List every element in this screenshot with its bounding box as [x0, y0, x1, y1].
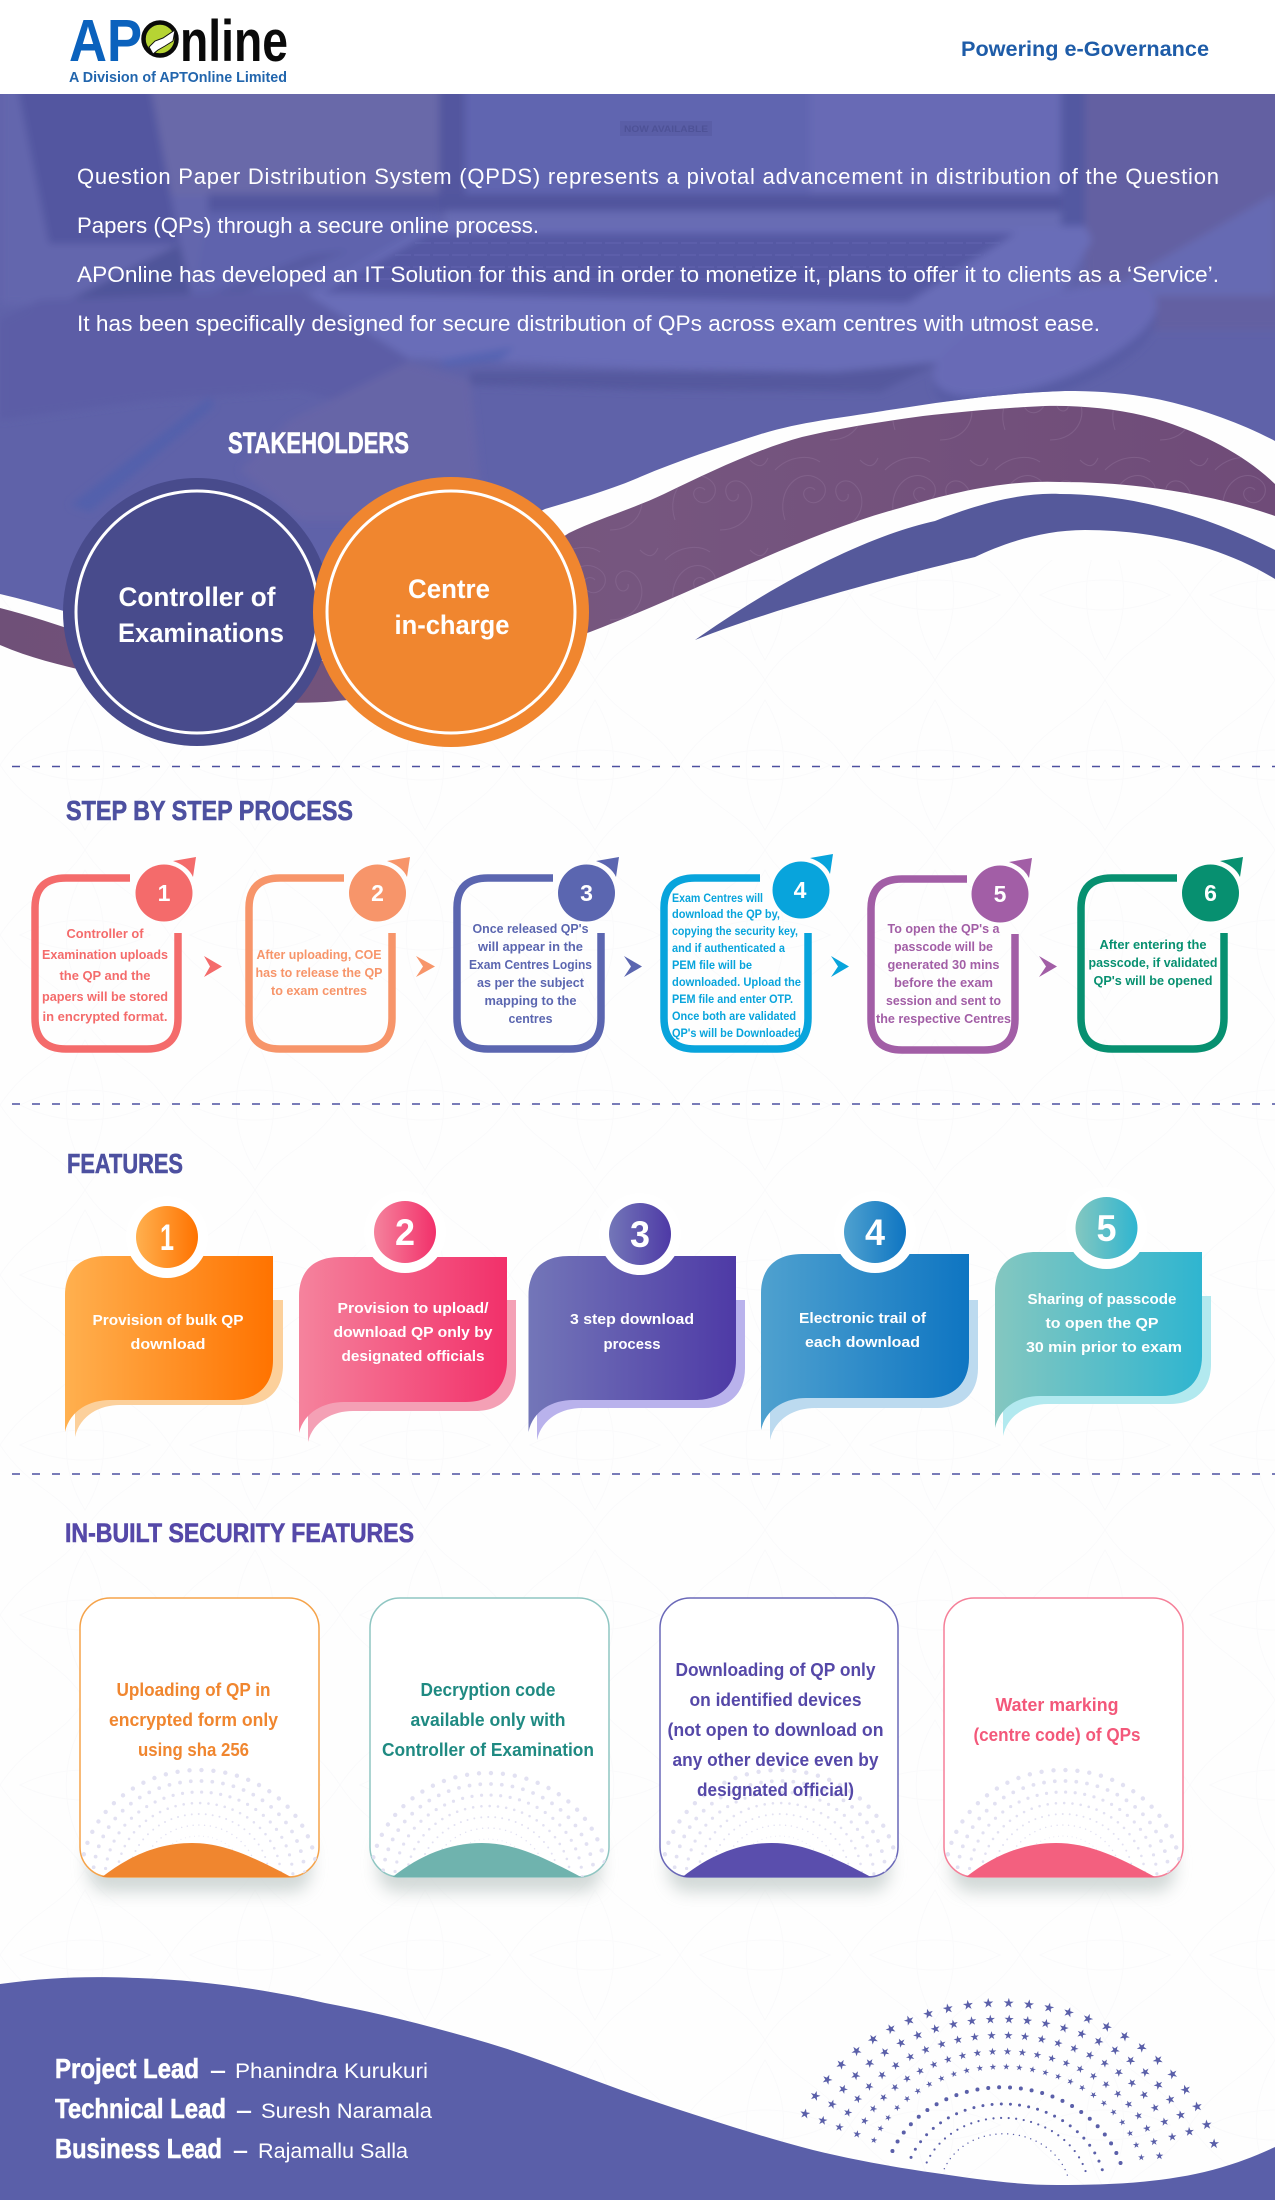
step 3: Exam Centres Logins	[469, 957, 592, 972]
intro paragraph: Question Paper Distribution System (QPDS) represents a pivotal advancement in distribution of the Question	[77, 164, 1219, 189]
feature 5: to open the QP	[1046, 1315, 1158, 1332]
screen label	[620, 121, 712, 136]
step 1: papers will be stored	[42, 989, 168, 1004]
feature 1: Provision of bulk QP	[92, 1312, 244, 1329]
arrow 2	[416, 956, 435, 977]
security card 3: any other device even by	[672, 1750, 878, 1770]
step 6	[1081, 857, 1243, 1049]
step 4: QP's will be Downloaded	[672, 1028, 801, 1040]
step 5: before the exam	[894, 975, 993, 990]
feature 5: Sharing of passcode	[1028, 1291, 1176, 1308]
technical lead: Technical Lead	[55, 2093, 226, 2124]
stakeholders heading: STAKEHOLDERS	[228, 427, 409, 460]
step 5: the respective Centres	[876, 1011, 1011, 1026]
security card 4	[944, 1598, 1183, 1892]
business lead: Business Lead	[55, 2133, 222, 2164]
feature 3	[528, 1193, 745, 1440]
step 3	[457, 857, 619, 1049]
step 2: 2	[371, 880, 384, 906]
security card 3	[660, 1598, 898, 1892]
feature 1: 1	[160, 1217, 174, 1258]
step 6: 6	[1204, 880, 1217, 906]
security card 3: on identified devices	[690, 1690, 862, 1710]
circle: centre in-charge	[313, 477, 589, 747]
circle: centre in-charge: Centre	[408, 574, 490, 604]
arrow 1	[204, 956, 222, 977]
logo	[69, 8, 288, 86]
step 4: Exam Centres will	[672, 893, 763, 905]
feature 4: each download	[805, 1334, 920, 1351]
security card 2: available only with	[410, 1710, 566, 1730]
feature 3: 3	[630, 1214, 650, 1255]
business lead	[55, 2133, 408, 2164]
circle: controller of examinations: Examinations	[118, 618, 284, 648]
step 1: the QP and the	[60, 968, 150, 983]
feature 4	[761, 1191, 978, 1440]
logo: nline	[180, 9, 288, 74]
feature 2: Provision to upload/	[338, 1300, 489, 1317]
security card 1: using sha 256	[138, 1740, 249, 1760]
step 2: to exam centres	[271, 983, 367, 998]
security card 1: Uploading of QP in	[116, 1680, 270, 1700]
feature 2: designated officials	[342, 1348, 484, 1365]
step 1: 1	[158, 880, 171, 906]
feature 5: 5	[1096, 1208, 1116, 1249]
security card 2: Decryption code	[420, 1680, 556, 1700]
footer wave	[0, 1977, 1275, 2200]
step 3: centres	[508, 1011, 552, 1026]
step 4: Once both are validated	[672, 1011, 796, 1023]
project lead	[55, 2053, 428, 2084]
feature 5	[995, 1187, 1211, 1436]
security heading: IN-BUILT SECURITY FEATURES	[65, 1518, 414, 1548]
intro paragraph	[77, 164, 1219, 336]
step 6: QP's will be opened	[1094, 973, 1213, 988]
step 1: Examination uploads	[42, 947, 168, 962]
feature 2	[299, 1191, 516, 1442]
feature 3: process	[604, 1336, 660, 1353]
arrow 4	[831, 956, 849, 977]
security card 1: encrypted form only	[109, 1710, 278, 1730]
step 4: 4	[794, 877, 807, 903]
security card 1	[80, 1598, 319, 1892]
step 6: passcode, if validated	[1088, 955, 1218, 970]
star fan decoration: ★★★★★★★★★★★★★★★★★★★★★★★★★★	[871, 2064, 1144, 2160]
feature 3: 3 step download	[570, 1311, 694, 1328]
circle: controller of examinations	[63, 478, 331, 746]
step 1: in encrypted format.	[42, 1009, 168, 1024]
star fan decoration: ★★★★★★★★★★★★★★★★★★★★★★★★★★	[800, 1998, 1219, 2148]
security card 3: Downloading of QP only	[676, 1660, 876, 1680]
step 2: has to release the QP	[256, 965, 383, 980]
business lead: Rajamallu Salla	[258, 2140, 408, 2163]
step 3: will appear in the	[477, 939, 583, 954]
logo: A Division of APTOnline Limited	[69, 69, 287, 86]
feature 5: 30 min prior to exam	[1026, 1339, 1182, 1356]
technical lead	[55, 2093, 432, 2124]
step 5: 5	[994, 881, 1007, 907]
step 4: and if authenticated a	[672, 943, 786, 955]
security card 4: Water marking	[996, 1695, 1118, 1715]
hero banner with laptop photo	[0, 80, 1275, 654]
step 4: PEM file will be	[672, 960, 752, 972]
feature 1: download	[130, 1336, 206, 1353]
step 1: Controller of	[66, 926, 144, 941]
arrow 3	[624, 956, 642, 977]
header bar	[0, 0, 1275, 94]
logo: AP	[69, 8, 142, 74]
maroon paisley wave	[0, 406, 1275, 703]
project lead: Phanindra Kurukuri	[235, 2060, 428, 2083]
feature 1	[65, 1196, 283, 1437]
step 4: copying the security key,	[672, 926, 798, 938]
technical lead: Suresh Naramala	[261, 2100, 432, 2123]
star fan decoration: ★★★★★★★★★★★★★★★★★★★★★★★★★★	[854, 2048, 1164, 2160]
project lead: –	[210, 2058, 226, 2083]
feature 4: Electronic trail of	[799, 1310, 927, 1327]
step 3: as per the subject	[477, 975, 585, 990]
intro paragraph: It has been specifically designed for secure distribution of QPs across exam centres with utmost ease.	[77, 311, 1100, 336]
business lead: –	[233, 2138, 248, 2163]
features heading: FEATURES	[67, 1148, 183, 1179]
circle: centre in-charge: in-charge	[394, 610, 510, 640]
step 6: After entering the	[1100, 937, 1206, 952]
step 2: After uploading, COE	[256, 947, 382, 962]
feature 4: 4	[865, 1212, 885, 1253]
step 4: PEM file and enter OTP.	[672, 994, 793, 1006]
step 4: download the QP by,	[672, 909, 780, 921]
circle: controller of examinations: Controller of	[118, 582, 276, 612]
security card 3: designated official)	[697, 1780, 854, 1800]
step 1	[35, 857, 196, 1049]
security card 2: Controller of Examination	[382, 1740, 594, 1760]
security card 3: (not open to download on	[668, 1720, 884, 1740]
step 3: Once released QP's	[472, 921, 588, 936]
technical lead: –	[236, 2098, 252, 2123]
feature 2: download QP only by	[334, 1324, 493, 1341]
intro paragraph: APOnline has developed an IT Solution for this and in order to monetize it, plans to offer it to clients as a ‘Service’.	[77, 262, 1219, 287]
tagline: Powering e-Governance	[961, 38, 1209, 61]
step 4	[664, 854, 833, 1049]
screen label: NOW AVAILABLE	[624, 124, 708, 134]
step 3: mapping to the	[484, 993, 576, 1008]
security card 4: (centre code) of QPs	[974, 1725, 1140, 1745]
arrow 5	[1039, 956, 1057, 977]
step 4: downloaded. Upload the	[672, 977, 801, 989]
step 5: generated 30 mins	[888, 957, 1000, 972]
intro paragraph: Papers (QPs) through a secure online process.	[77, 213, 539, 238]
step 3: 3	[580, 880, 593, 906]
security card 2	[370, 1598, 609, 1892]
step by step heading: STEP BY STEP PROCESS	[66, 795, 353, 826]
step 5: session and sent to	[886, 993, 1001, 1008]
feature 2: 2	[395, 1212, 415, 1253]
step 5: passcode will be	[894, 939, 993, 954]
step 2	[249, 857, 410, 1049]
project credits	[55, 2053, 432, 2164]
blue wave	[695, 494, 1275, 640]
project lead: Project Lead	[55, 2053, 199, 2084]
step 5	[871, 858, 1032, 1050]
step 5: To open the QP's a	[888, 921, 1000, 936]
